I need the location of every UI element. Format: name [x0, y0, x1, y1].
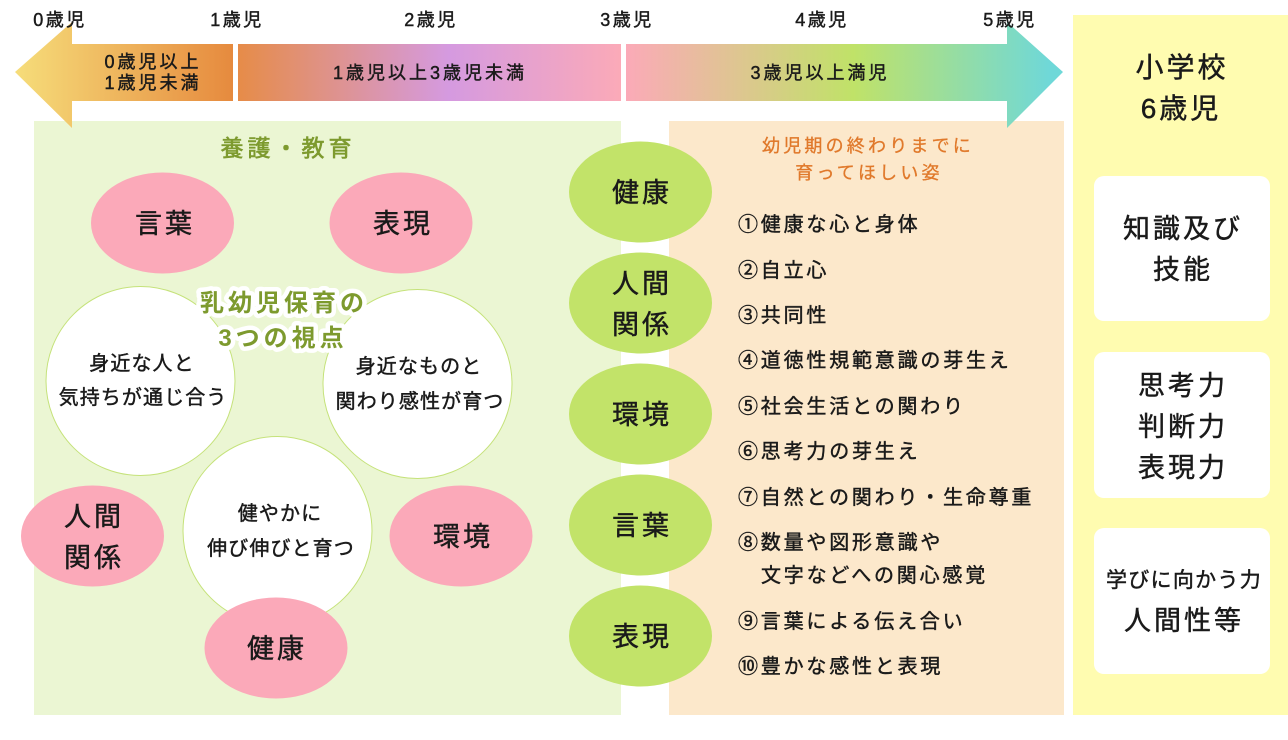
- ellipse: expression: 表現: [373, 209, 433, 239]
- heading: elementary school age six: [1135, 52, 1229, 124]
- list: ten qualities: ④道徳性規範意識の芽生え: [738, 349, 1012, 372]
- age labels: 3歳児: [600, 10, 654, 30]
- area: environment: 環境: [612, 400, 672, 430]
- area: human relations: [569, 252, 712, 354]
- area: expression: [569, 586, 712, 686]
- age labels: 0歳児: [33, 10, 87, 30]
- area: words: [569, 474, 712, 576]
- ellipse: environment: 環境: [433, 522, 493, 552]
- ellipse: human relations: 関係: [64, 543, 124, 573]
- age labels: 5歳児: [983, 10, 1037, 30]
- list: ten qualities: ⑨言葉による伝え合い: [738, 610, 965, 633]
- arrow: 0 to 1 year segment: 1歳児未満: [104, 73, 202, 93]
- ellipse: words: 言葉: [135, 209, 195, 239]
- arrow: 1 to 3 year segment: [238, 44, 621, 101]
- circle: close people: [46, 286, 235, 476]
- ellipse column: five areas: [569, 142, 712, 686]
- circle: close things: [323, 290, 512, 478]
- card: motivation and humanity: 人間性等: [1124, 606, 1244, 636]
- title: three perspectives: 乳幼児保育の: [200, 290, 368, 317]
- title: three perspectives: [200, 290, 368, 352]
- ellipse: words: [91, 172, 234, 274]
- list: ten qualities: 文字などへの関心感覚: [761, 564, 988, 587]
- circle: healthy growth: 伸び伸びと育つ: [207, 537, 355, 560]
- circle: close things: 関わり感性が育つ: [336, 390, 504, 413]
- area: human relations: 関係: [612, 310, 672, 340]
- card: motivation and humanity: 学びに向かう力: [1106, 569, 1262, 592]
- panel: elementary school: [1073, 15, 1288, 715]
- list: ten qualities: [738, 213, 1034, 678]
- ellipse: human relations: 人間: [64, 502, 124, 532]
- age labels: 1歳児: [210, 10, 264, 30]
- arrow: 0 to 1 year segment: 0歳児以上: [104, 52, 202, 72]
- card: knowledge and skills: 技能: [1153, 255, 1213, 285]
- arrow: 0 to 1 year segment: [15, 22, 233, 128]
- age labels: 4歳児: [795, 10, 849, 30]
- heading: elementary school age six: 小学校: [1135, 52, 1229, 83]
- list: ten qualities: ⑥思考力の芽生え: [738, 440, 920, 463]
- circle: healthy growth: 健やかに: [238, 502, 322, 525]
- ellipse: health: 健康: [247, 634, 307, 664]
- arrow: 1 to 3 year segment: 1歳児以上3歳児未満: [333, 63, 527, 83]
- list: ten qualities: ③共同性: [738, 304, 829, 327]
- list: ten qualities: ⑧数量や図形意識や: [738, 531, 943, 554]
- card: thinking, judgment, expression: 思考力: [1138, 371, 1228, 401]
- arrow: 3 year and over segment: [626, 22, 1063, 128]
- title: three perspectives: 3つの視点: [218, 325, 348, 352]
- area: human relations: 人間: [612, 269, 672, 299]
- list: ten qualities: ②自立心: [738, 259, 829, 282]
- circle: close things: 身近なものと: [356, 355, 482, 378]
- list: ten qualities: ⑦自然との関わり・生命尊重: [738, 486, 1034, 509]
- age labels: 2歳児: [404, 10, 458, 30]
- heading: elementary school age six: 6歳児: [1141, 93, 1221, 124]
- arrow: 3 year and over segment: 3歳児以上満児: [750, 63, 890, 83]
- card: knowledge and skills: 知識及び: [1123, 214, 1243, 244]
- heading: nursing and education: 養護・教育: [220, 135, 356, 161]
- heading: desired qualities: [762, 136, 974, 183]
- area: environment: [569, 364, 712, 464]
- card: knowledge and skills: [1094, 176, 1270, 321]
- panel: desired qualities: [669, 121, 1064, 715]
- area: health: 健康: [612, 178, 672, 208]
- card: thinking, judgment, expression: [1094, 352, 1270, 498]
- heading: desired qualities: 育ってほしい姿: [795, 163, 943, 183]
- card: thinking, judgment, expression: 判断力: [1138, 412, 1228, 442]
- ellipse: environment: [390, 486, 532, 586]
- area: health: [569, 142, 712, 242]
- card: motivation and humanity: [1094, 528, 1270, 674]
- area: words: 言葉: [612, 511, 672, 541]
- list: ten qualities: ⑩豊かな感性と表現: [738, 655, 943, 678]
- card: thinking, judgment, expression: 表現力: [1138, 453, 1228, 483]
- list: ten qualities: ①健康な心と身体: [738, 213, 920, 236]
- ellipse: health: [204, 598, 348, 698]
- age labels: [33, 10, 1037, 30]
- circle: healthy growth: [183, 436, 372, 626]
- area: expression: 表現: [612, 622, 672, 652]
- heading: desired qualities: 幼児期の終わりまでに: [762, 136, 974, 156]
- panel: nursing and education: [34, 121, 621, 715]
- ellipse: human relations: [21, 486, 164, 586]
- circle: close people: 身近な人と: [89, 352, 195, 375]
- ellipse: expression: [330, 172, 472, 274]
- circle: close people: 気持ちが通じ合う: [59, 386, 227, 409]
- list: ten qualities: ⑤社会生活との関わり: [738, 395, 966, 418]
